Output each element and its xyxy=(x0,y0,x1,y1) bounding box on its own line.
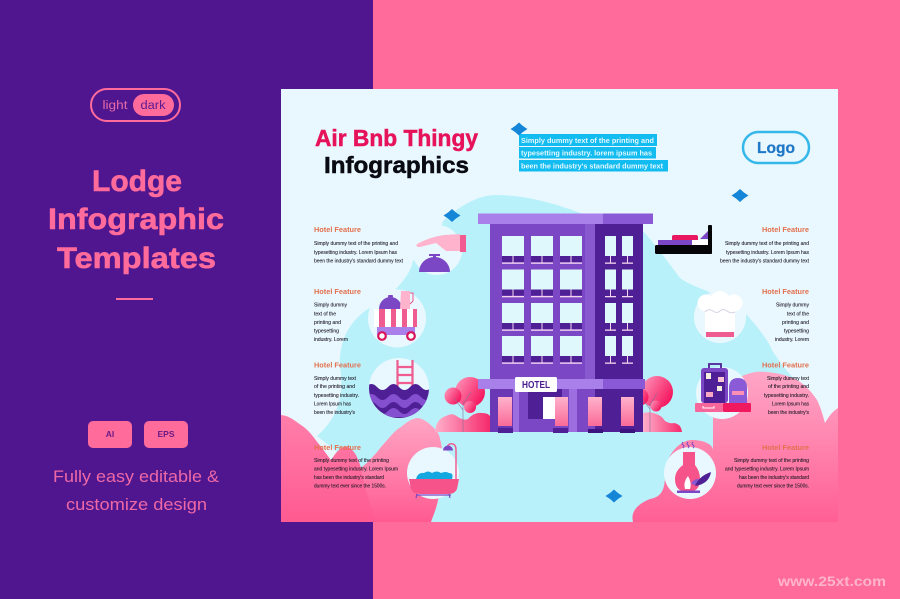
icon: luggage xyxy=(695,364,751,419)
feature 4 right text: and typesetting industry. Lorem Ipsum xyxy=(725,466,810,472)
text block: highlighted intro: been the industry's standard dummy text xyxy=(521,162,664,170)
feature 3 right text: typesetting industry. xyxy=(764,393,809,399)
icon: flask with leaf xyxy=(664,442,716,499)
icon: chef hat xyxy=(694,291,746,343)
text: editable design tagline xyxy=(53,467,220,514)
feature 1 right text: Simply dummy text of the printing and xyxy=(725,241,809,247)
feature 3 left text xyxy=(314,360,361,416)
panel: purple left background xyxy=(0,0,373,599)
icon: bed xyxy=(655,225,712,254)
building windows front xyxy=(502,236,582,364)
feature 2 left text: Hotel Feature xyxy=(314,287,361,296)
badge: AI: AI xyxy=(106,429,114,439)
heading: Lodge Infographic Templates: Infographic xyxy=(48,203,224,236)
feature 2 right text: Simply dummy xyxy=(776,302,809,308)
building ground floor xyxy=(478,379,645,433)
title: Air Bnb Thingy Infographics xyxy=(315,125,478,178)
feature 3 right text: of the printing and xyxy=(768,384,809,390)
feature 1 left text: been the industry's standard dummy text xyxy=(314,258,403,264)
watermark: www.25xt.com xyxy=(777,573,886,589)
icon: pool with ladder xyxy=(369,358,429,418)
feature 1 right text: been the industry's standard dummy text xyxy=(720,258,809,264)
text: editable design tagline: customize design xyxy=(66,495,207,514)
badge: EPS: EPS xyxy=(157,429,175,439)
icon: bathtub and shower xyxy=(407,444,459,499)
feature 2 left text xyxy=(314,287,361,343)
feature 3 right text: been the industry's xyxy=(768,410,809,416)
feature 3 left text: been the industry's xyxy=(314,410,355,416)
feature 4 left text: has been the industry's standard xyxy=(314,475,384,481)
illustration: hotel building xyxy=(478,214,653,433)
building windows side xyxy=(605,236,633,364)
feature 2 left text: text of the xyxy=(314,312,336,318)
feature 4 left text: Simply dummy text of the printing xyxy=(314,458,389,464)
title: Air Bnb Thingy Infographics: Air Bnb Thingy xyxy=(315,125,478,151)
feature 1 left text: Simply dummy text of the printing and xyxy=(314,241,398,247)
feature 4 right text xyxy=(725,443,810,490)
feature 1 right text xyxy=(720,225,809,264)
feature 2 left text: Simply dummy xyxy=(314,302,347,308)
panel: infographic card xyxy=(281,89,838,522)
text block: highlighted intro: Simply dummy text of the printing and xyxy=(521,136,654,145)
feature 4 right text: Simply dummy text of the printing xyxy=(734,458,809,464)
toggle: light dark xyxy=(91,89,180,121)
logo badge xyxy=(743,132,809,163)
feature 1 left text: Hotel Feature xyxy=(314,225,361,234)
icon: diamond stars xyxy=(444,122,748,502)
feature 2 right text: text of the xyxy=(787,312,809,318)
badge: EPS xyxy=(144,421,188,448)
feature 4 left text xyxy=(314,443,399,490)
feature 2 right text: industry. Lorem xyxy=(775,337,810,343)
feature 4 left text: and typesetting industry. Lorem Ipsum xyxy=(314,466,399,472)
feature 1 left text xyxy=(314,225,403,264)
illustration: left tree and bush xyxy=(435,377,490,432)
feature 3 right text: Simply dummy text xyxy=(767,376,809,382)
feature 3 left text: typesetting industry. xyxy=(314,393,359,399)
feature 2 left text: typesetting xyxy=(314,328,339,334)
feature 3 left text: Hotel Feature xyxy=(314,360,361,370)
feature 3 right text: Lorem Ipsum has xyxy=(772,402,809,408)
heading: Lodge Infographic Templates: Templates xyxy=(57,242,216,275)
feature 4 left text: dummy text ever since the 1500s. xyxy=(314,484,386,490)
icon: hand and service bell xyxy=(412,225,466,275)
hotel sign xyxy=(515,377,557,392)
icon: food cart xyxy=(368,290,426,348)
feature 4 right text: dummy text ever since the 1500s. xyxy=(737,484,809,490)
feature 1 left text: typesetting industry. Lorem Ipsum has xyxy=(314,250,397,256)
feature 3 right text: Hotel Feature xyxy=(762,360,809,370)
feature 2 right text: Hotel Feature xyxy=(762,287,809,296)
feature 4 right text: Hotel Feature xyxy=(762,443,809,452)
text: editable design tagline: Fully easy editable & xyxy=(53,467,220,486)
feature 2 right text xyxy=(762,287,810,343)
feature 1 right text: typesetting industry. Lorem Ipsum has xyxy=(726,250,809,256)
feature 3 left text: of the printing and xyxy=(314,384,355,390)
logo badge: Logo xyxy=(757,140,795,157)
heading: Lodge Infographic Templates xyxy=(48,165,224,275)
feature 4 left text: Hotel Feature xyxy=(314,443,361,452)
feature 3 right text xyxy=(762,360,809,416)
title: Air Bnb Thingy Infographics: Infographics xyxy=(324,152,469,178)
feature 1 right text: Hotel Feature xyxy=(762,225,809,234)
panel: pink right background xyxy=(373,0,900,599)
feature 2 right text: printing and xyxy=(782,320,809,326)
feature 4 right text: has been the industry's standard xyxy=(739,475,809,481)
toggle: light dark: dark xyxy=(140,100,166,112)
feature 3 left text: Simply dummy text xyxy=(314,376,356,382)
badge: AI xyxy=(88,421,132,448)
illustration: right tree and bush xyxy=(632,376,682,432)
toggle: light dark: light xyxy=(102,100,128,112)
hotel sign: HOTEL xyxy=(522,380,550,391)
feature 2 left text: printing and xyxy=(314,320,341,326)
text block: highlighted intro: typesetting industry. lorem ipsum has xyxy=(521,148,652,158)
heading: Lodge Infographic Templates: Lodge xyxy=(92,165,182,198)
feature 3 left text: Lorem Ipsum has xyxy=(314,402,351,408)
feature 2 right text: typesetting xyxy=(784,328,809,334)
feature 2 left text: industry. Lorem xyxy=(314,337,349,343)
text block: highlighted intro xyxy=(519,134,668,172)
